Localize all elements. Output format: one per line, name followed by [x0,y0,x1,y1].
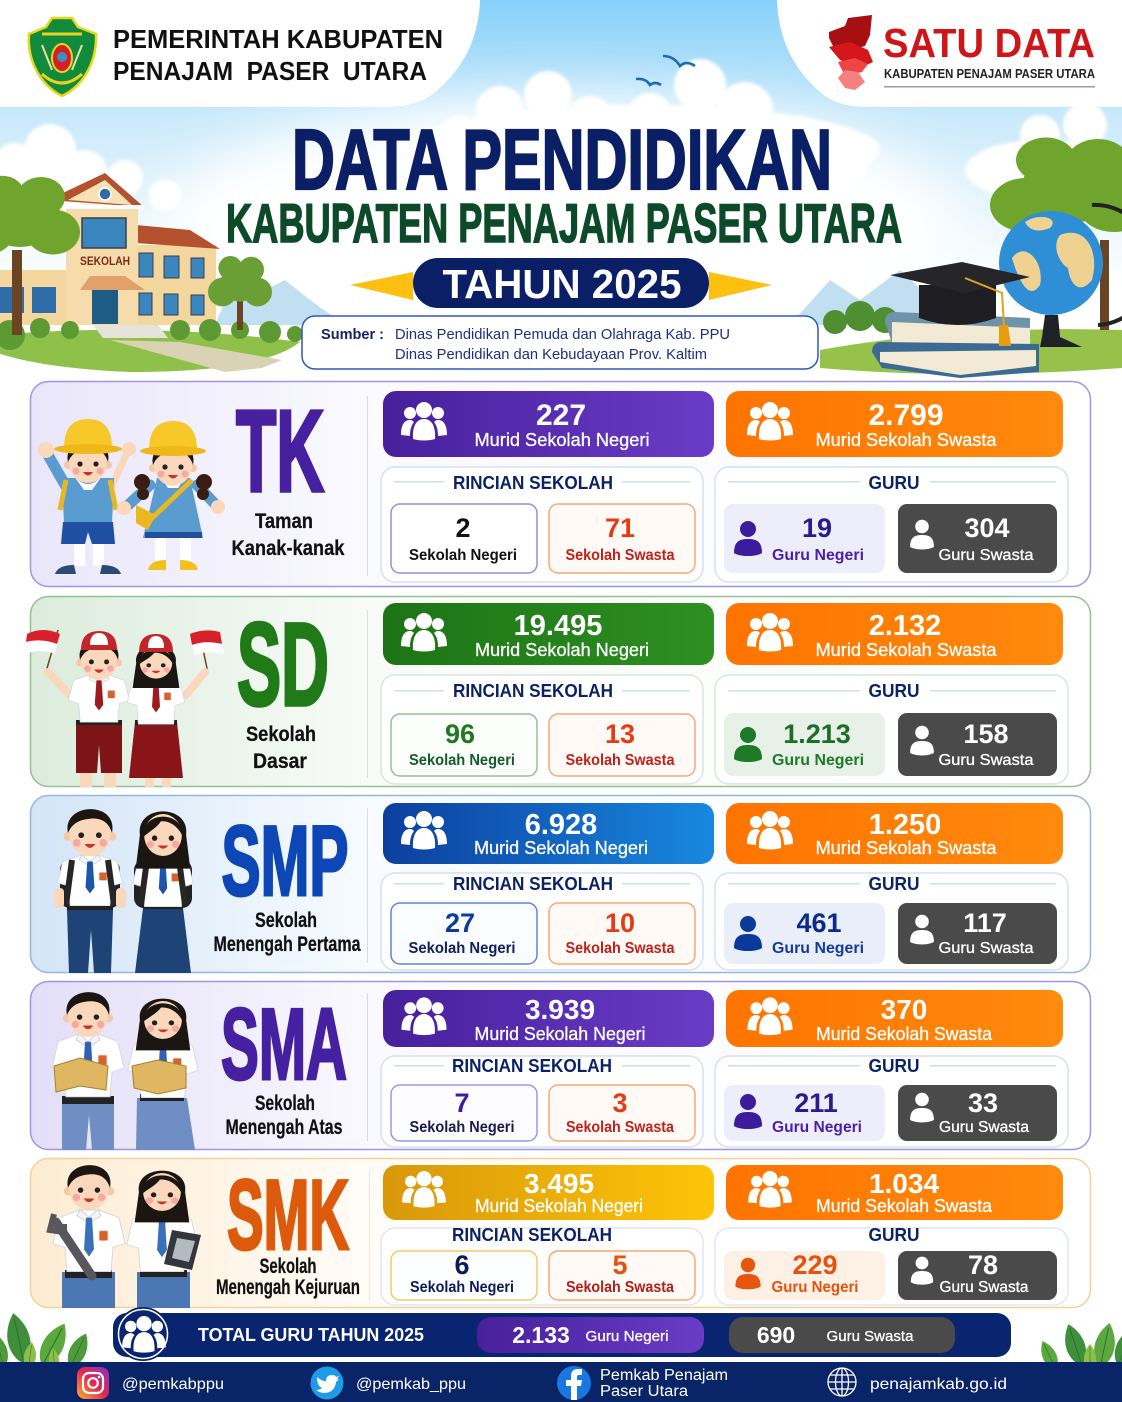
cell: sekolah swasta: 10 [605,908,635,938]
group: guru: GURU [868,1055,920,1076]
social: facebook: Paser Utara [600,1383,688,1400]
label: SD full name [246,723,316,773]
group: rincian sekolah [381,675,703,784]
stat: murid swasta: Murid Sekolah Swasta [816,430,997,450]
stat: murid negeri: 6.928 [525,809,597,841]
stat: murid negeri [383,990,714,1047]
stat: murid swasta: 1.250 [869,809,941,841]
total guru swasta [729,1317,955,1353]
cell: guru negeri [724,504,885,573]
year badge [350,258,772,308]
source box: Dinas Pendidikan Pemuda dan Olahraga Kab. PPU [395,327,730,343]
cell: sekolah negeri: 2 [455,513,471,543]
group: rincian sekolah: RINCIAN SEKOLAH [453,873,613,894]
cell: sekolah negeri [391,1250,537,1300]
label: SMA full name [226,1092,342,1139]
social: instagram [77,1367,224,1399]
group: rincian sekolah [381,467,703,582]
cell: sekolah swasta: Sekolah Swasta [566,940,675,957]
cell: sekolah negeri [391,714,537,776]
group: guru [715,675,1068,784]
heading: TK: TK [236,386,324,516]
cell: sekolah swasta: Sekolah Swasta [566,752,675,769]
cell: sekolah negeri: Sekolah Negeri [409,752,515,769]
cell: sekolah swasta [549,504,695,573]
group: guru: GURU [868,472,920,493]
stat: murid negeri: 3.939 [525,994,595,1025]
group: guru [715,1224,1068,1305]
stat: murid negeri: Murid Sekolah Negeri [474,838,648,858]
stat: murid swasta: Murid Sekolah Swasta [816,838,997,858]
social: facebook: Pemkab Penajam [600,1367,728,1384]
cell: guru swasta: 304 [964,513,1010,543]
label: SMK full name [216,1255,360,1299]
stat: murid swasta [726,391,1063,457]
label: SMA full name: Menengah Atas [226,1116,342,1139]
total bar [113,1307,1011,1361]
stat: murid swasta: 2.799 [868,399,944,432]
cell: guru swasta: 158 [963,719,1009,749]
stat: murid negeri: Murid Sekolah Negeri [474,430,650,450]
total guru swasta: 690 [757,1322,795,1348]
illustration: SMK students with tools [50,1165,201,1308]
cell: guru swasta [898,1085,1057,1141]
group: guru: GURU [868,680,920,701]
cell: sekolah swasta [549,714,695,776]
total guru swasta: Guru Swasta [826,1328,914,1345]
group: rincian sekolah [381,873,703,970]
icon: regency map [829,15,873,90]
illustration: SMA students with books [52,992,198,1150]
heading: SMP: SMP [222,805,348,916]
cell: guru negeri [724,903,885,964]
cell: sekolah swasta: Sekolah Swasta [566,1119,674,1136]
header text [113,24,443,86]
panel: SMK [30,1158,1090,1308]
source box: Dinas Pendidikan dan Kebudayaan Prov. Kaltim [395,347,707,363]
social: website: penajamkab.go.id [870,1376,1007,1393]
cell: sekolah negeri [391,1085,537,1141]
stat: murid negeri: 19.495 [514,610,602,642]
sign text: SEKOLAH [80,254,130,268]
stat: murid negeri [383,391,714,457]
stat: murid negeri [383,603,714,665]
year badge: TAHUN 2025 [442,261,682,307]
cell: sekolah negeri: Sekolah Negeri [409,547,517,564]
group: rincian sekolah [381,1055,703,1147]
title: DATA PENDIDIKAN [292,113,832,208]
cell: sekolah negeri: 96 [445,719,475,749]
cell: sekolah negeri [391,504,537,573]
source box [302,316,818,369]
label: TK full name: Kanak-kanak [232,537,345,560]
stat: murid swasta [726,803,1063,864]
header text: PEMERINTAH KABUPATEN [113,24,443,54]
cell: sekolah swasta [549,903,695,964]
stat: murid swasta: 370 [881,994,927,1025]
cell: sekolah negeri: 7 [454,1088,470,1118]
cell: guru swasta [898,1250,1057,1300]
total guru negeri: Guru Negeri [586,1328,668,1345]
cell: guru negeri: Guru Negeri [772,752,864,769]
cell: guru swasta: 78 [968,1250,998,1280]
cell: guru negeri: 1.213 [783,719,851,749]
cell: guru negeri [724,713,885,776]
cell: sekolah negeri: Sekolah Negeri [410,1119,514,1136]
cell: sekolah swasta: 71 [605,513,635,543]
header text: PENAJAM PASER UTARA [113,56,427,86]
social: website [828,1368,1007,1396]
heading: SD: SD [237,599,329,731]
cell: guru negeri: Guru Negeri [772,1119,862,1136]
cell: sekolah negeri [391,903,537,964]
stat: murid swasta: Murid Sekolah Swasta [816,640,997,660]
cell: sekolah swasta: 3 [612,1088,628,1118]
stat: murid swasta: 2.132 [869,610,941,642]
label: SMP full name: Sekolah [255,909,317,932]
group: rincian sekolah: RINCIAN SEKOLAH [453,472,613,493]
cell: sekolah swasta [549,1250,695,1300]
stat: murid swasta: 1.034 [869,1168,939,1199]
label: SMA full name: Sekolah [255,1092,315,1115]
group: guru [715,467,1068,582]
cell: guru negeri: Guru Negeri [772,940,864,957]
stat: murid negeri: Murid Sekolah Negeri [475,1196,643,1216]
group: guru: GURU [868,873,920,894]
label: SD full name: Sekolah [246,723,316,746]
icon: total guru [116,1307,170,1361]
group: rincian sekolah: RINCIAN SEKOLAH [452,1055,612,1076]
group: guru [715,1055,1068,1147]
logo text: SATU DATA [883,20,1095,66]
cell: sekolah swasta: Sekolah Swasta [566,1279,674,1296]
heading: SMA: SMA [221,989,347,1101]
stat: murid negeri: 227 [536,399,586,432]
cell: guru swasta: 117 [963,908,1007,938]
cell: sekolah swasta: Sekolah Swasta [566,547,675,564]
stat: murid swasta: Murid Sekolah Swasta [816,1024,993,1044]
scene: school building with trees and lawn [0,173,303,372]
illustration: SMP students [54,809,193,973]
social: instagram: @pemkabppu [122,1376,224,1393]
panel: SD [25,596,1090,787]
cell: guru swasta: Guru Swasta [938,752,1034,769]
group: rincian sekolah: RINCIAN SEKOLAH [453,680,613,701]
cell: sekolah negeri: Sekolah Negeri [408,940,516,957]
cell: sekolah swasta: 5 [612,1250,628,1280]
icon: birds [636,56,695,85]
decoration: corner leaves right [1036,1321,1122,1373]
cell: guru negeri: Guru Negeri [772,1279,858,1296]
cell: sekolah negeri: 6 [454,1250,470,1280]
stat: murid swasta [726,990,1063,1047]
cell: guru swasta [898,713,1057,776]
panel: government header [0,0,480,107]
cell: guru swasta: Guru Swasta [939,1119,1029,1136]
cell: guru negeri [724,1250,885,1300]
label: SMK full name: Sekolah [260,1255,316,1278]
cell: sekolah swasta [549,1085,695,1141]
group: guru [715,873,1068,970]
group: guru: GURU [868,1224,920,1245]
label: SMP full name: Menengah Pertama [214,933,361,956]
cell: guru swasta [898,504,1057,573]
social: facebook [557,1366,728,1400]
logo text [883,20,1095,88]
cell: guru negeri: 211 [794,1088,838,1118]
panel: SMA [30,982,1090,1150]
illustration: TK children [38,419,225,574]
cell: sekolah negeri: Sekolah Negeri [410,1279,514,1296]
stat: murid negeri [383,1165,714,1220]
source box: Sumber : [321,327,384,343]
footer bar [0,1362,1122,1402]
cell: guru swasta: Guru Swasta [940,1279,1029,1296]
total guru negeri: 2.133 [512,1322,570,1348]
stat: murid swasta [726,1165,1063,1220]
cell: guru negeri [724,1085,885,1141]
total guru negeri [477,1317,704,1353]
cell: guru negeri: 229 [792,1250,838,1280]
stat: murid negeri: 3.495 [524,1168,594,1199]
cell: sekolah swasta: 13 [605,719,635,749]
cell: guru swasta: Guru Swasta [938,940,1034,957]
stat: murid swasta: Murid Sekolah Swasta [816,1196,993,1216]
stat: murid negeri: Murid Sekolah Negeri [474,1024,646,1044]
label: TK full name [232,510,345,560]
heading: SMK: SMK [227,1159,349,1270]
logo text: KABUPATEN PENAJAM PASER UTARA [884,67,1095,81]
group: rincian sekolah: RINCIAN SEKOLAH [452,1224,612,1245]
label: SMP full name [214,909,361,956]
stat: murid swasta [726,603,1063,665]
cell: guru swasta: 33 [968,1088,998,1118]
cell: guru negeri: 19 [802,513,832,543]
scene: globe, books and graduation cap [820,138,1122,378]
cell: guru swasta: Guru Swasta [938,547,1034,564]
cell: guru negeri: 461 [796,908,842,938]
icon: regency emblem [29,18,96,96]
cell: guru swasta [898,903,1057,964]
scene: sky and clouds [0,0,1122,380]
panel: SMP [30,796,1090,973]
label: SMK full name: Menengah Kejuruan [216,1276,360,1299]
label: TK full name: Taman [255,510,313,533]
label: SD full name: Dasar [253,750,307,773]
cell: sekolah negeri: 27 [445,908,475,938]
social: twitter: @pemkab_ppu [356,1376,466,1393]
group: rincian sekolah [381,1224,703,1305]
panel: Satu Data logo [777,0,1122,107]
stat: murid negeri [383,803,714,864]
decoration: corner leaves left [0,1311,93,1372]
illustration: SD students with flags [25,630,224,787]
social: twitter [310,1366,466,1400]
panel: TK [30,382,1090,586]
stat: murid negeri: Murid Sekolah Negeri [475,640,649,660]
total label: TOTAL GURU TAHUN 2025 [198,1325,424,1345]
cell: guru negeri: Guru Negeri [772,547,864,564]
